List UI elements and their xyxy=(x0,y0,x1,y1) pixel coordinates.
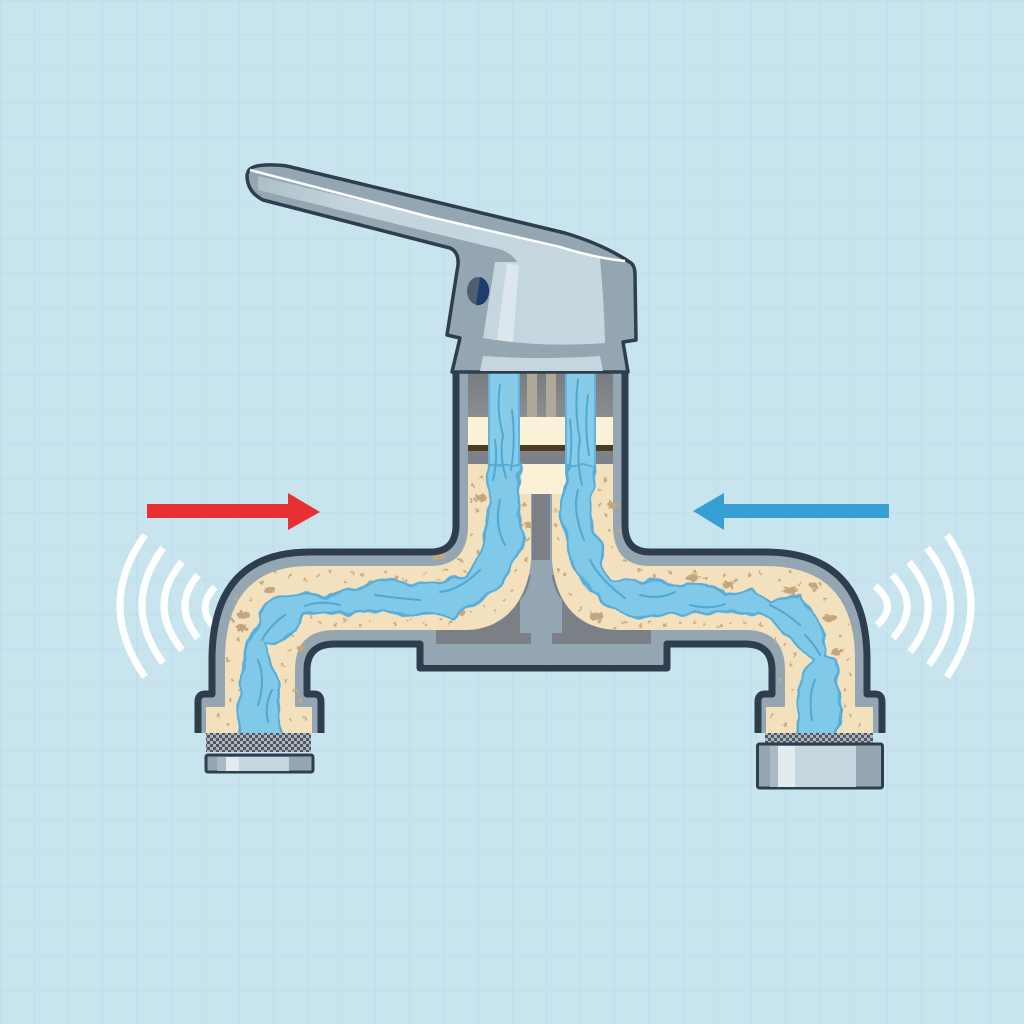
lower collar highlight xyxy=(480,356,603,371)
body outline xyxy=(198,372,882,733)
center flared column xyxy=(520,560,562,668)
cream center xyxy=(519,464,566,494)
screw xyxy=(467,277,489,305)
handle silhouette xyxy=(247,165,636,372)
left water stream xyxy=(235,465,522,740)
inner dark housing xyxy=(436,575,651,644)
faucet body xyxy=(198,372,882,733)
water ripple lines xyxy=(258,380,820,722)
cartridge gray top xyxy=(468,372,613,417)
lever handle xyxy=(247,165,636,372)
sand deposit left xyxy=(206,464,531,733)
sand deposit right xyxy=(552,464,873,733)
left mesh xyxy=(206,733,311,752)
cartridge tan stripes xyxy=(527,372,556,417)
right water stream xyxy=(562,465,842,740)
left water upper channel xyxy=(489,372,519,472)
right aerator xyxy=(758,733,882,788)
metal pipe wall xyxy=(198,372,882,733)
left ring xyxy=(206,755,313,772)
right water upper channel xyxy=(566,372,595,472)
white top glint xyxy=(250,170,625,261)
cream seal xyxy=(468,417,613,445)
center valve stem xyxy=(532,494,550,560)
gray spacer xyxy=(468,451,613,464)
left aerator xyxy=(206,733,313,772)
sound waves: right xyxy=(875,535,971,677)
arrow: red hot inlet xyxy=(147,493,320,530)
mineral specks xyxy=(218,470,860,725)
handle highlight xyxy=(258,176,605,345)
brown seal line xyxy=(468,445,613,451)
base metal bottom xyxy=(424,648,663,665)
right mesh xyxy=(765,733,873,743)
valve cartridge xyxy=(468,372,613,494)
arrow: blue cold inlet xyxy=(693,493,889,530)
sound waves: left xyxy=(120,535,215,677)
handle bright strip xyxy=(497,263,519,342)
right ring xyxy=(758,744,882,788)
